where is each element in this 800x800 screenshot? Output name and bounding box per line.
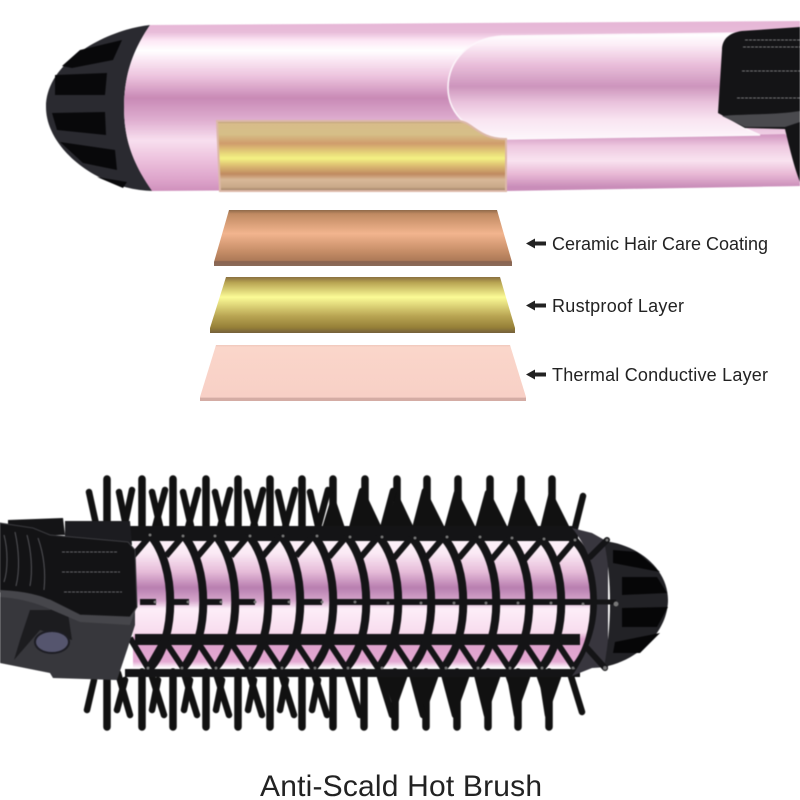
barrel pink body xyxy=(124,21,800,191)
label: rustproof layer: Rustproof Layer xyxy=(552,296,684,316)
handle clamp xyxy=(0,523,137,625)
lattice arms xyxy=(130,536,574,668)
layer: thermal conductive layer xyxy=(200,345,526,401)
top bristles xyxy=(89,479,583,540)
bottom bristles xyxy=(87,670,582,727)
label: thermal conductive layer: Thermal Conductive Layer xyxy=(552,365,768,385)
layer: ceramic hair care coating xyxy=(214,210,512,266)
brush frame rails xyxy=(125,526,580,677)
curling iron barrel illustration xyxy=(46,21,800,191)
layer: rustproof layer xyxy=(210,277,515,333)
hot brush illustration xyxy=(0,479,668,727)
brush end collar xyxy=(572,528,608,676)
clamp sleeve xyxy=(448,33,760,139)
rivet dots xyxy=(146,534,618,670)
lower barrel section xyxy=(506,134,800,191)
brush pink barrel xyxy=(133,540,593,670)
brush end cap with vents xyxy=(587,540,668,668)
handle lower body and button xyxy=(0,518,135,680)
barrel end cap with vents xyxy=(46,25,153,191)
middle stems xyxy=(140,599,590,605)
curved ribs xyxy=(150,535,594,668)
black clamp handle xyxy=(718,27,800,182)
exposed coating window xyxy=(217,121,506,191)
label: ceramic hair care coating: Ceramic Hair Care Coating xyxy=(552,234,768,254)
